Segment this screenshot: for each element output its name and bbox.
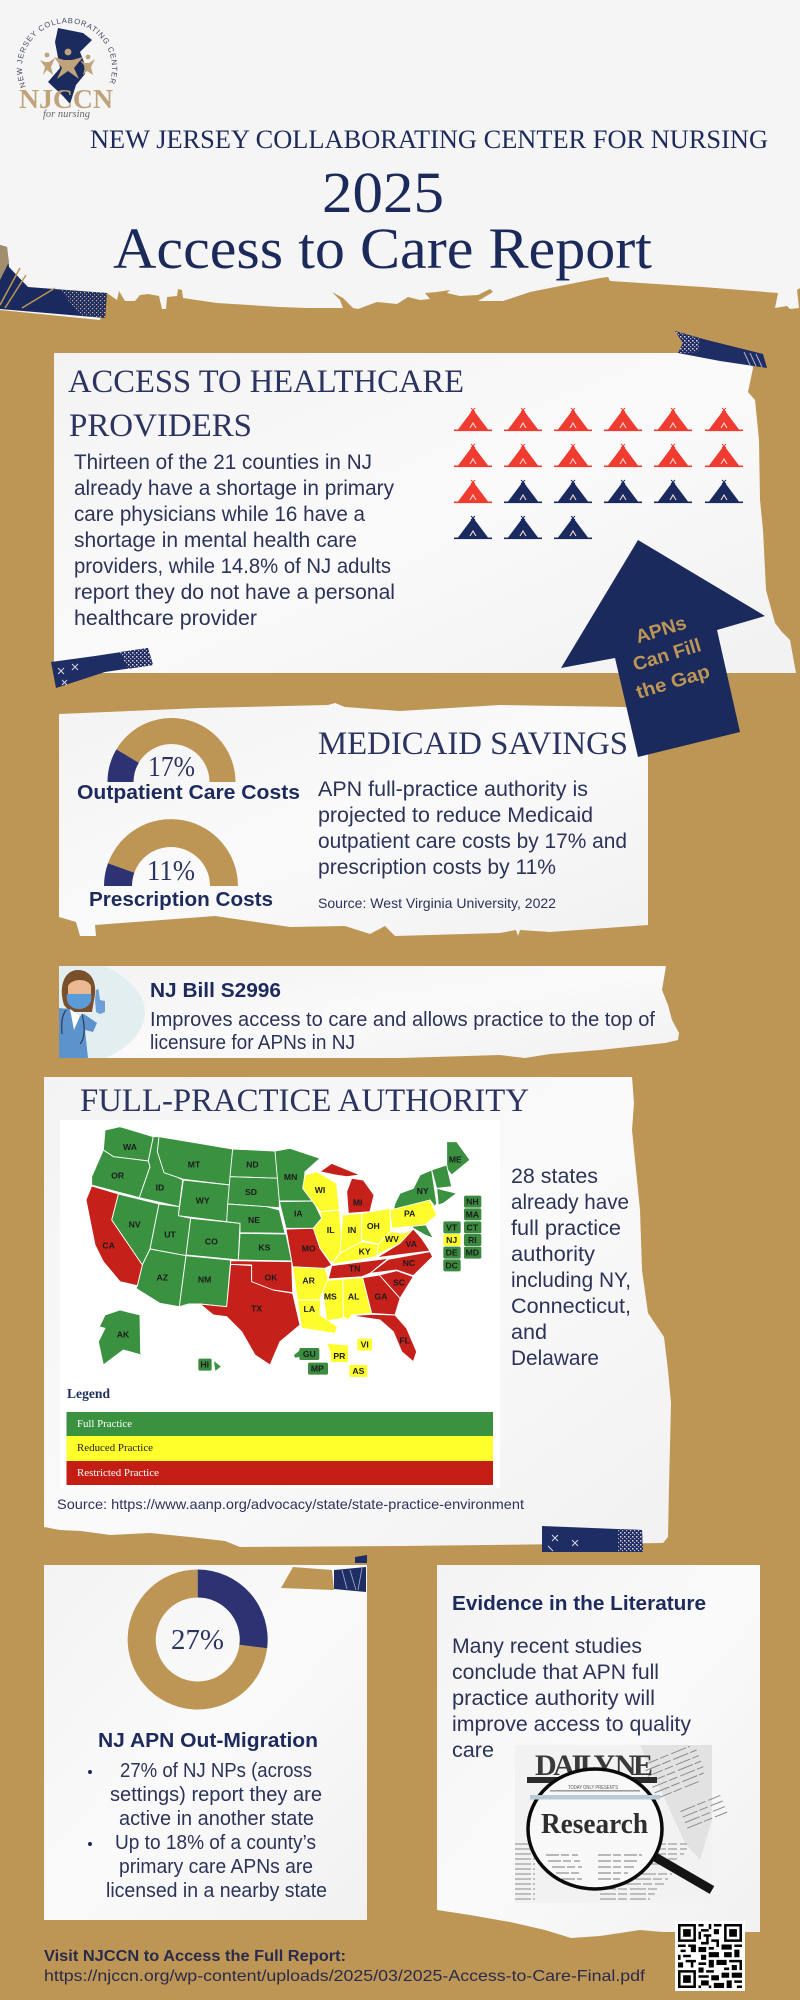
map background <box>60 1120 500 1488</box>
text: shortage body <box>74 451 395 630</box>
map: state labels: SC <box>393 1277 406 1287</box>
tape: full-practice panel <box>542 1526 643 1552</box>
tape: header <box>0 245 107 318</box>
arrow: APNs can fill the gap: the Gap <box>634 661 713 704</box>
chart: 27 percent donut: 27% <box>171 1624 224 1656</box>
list: out-migration bullets: 27% of NJ NPs (across <box>120 1760 312 1782</box>
map: state labels: OK <box>265 1273 278 1283</box>
map: state labels: PR <box>333 1351 346 1361</box>
chart: US map of practice authority <box>86 1127 481 1377</box>
logo: NEW JERSEY COLLABORATING CENTER <box>16 18 118 88</box>
header org name: NEW JERSEY COLLABORATING CENTER FOR NURSING <box>90 125 768 154</box>
heading: access to healthcare providers: PROVIDERS <box>69 408 252 444</box>
heading: full-practice authority: FULL-PRACTICE AUTHORITY <box>80 1083 529 1119</box>
map: state labels: WI <box>315 1185 325 1195</box>
text: evidence body: Many recent studies <box>452 1635 642 1658</box>
map: state labels: MA <box>466 1209 480 1219</box>
map: state labels: OR <box>111 1170 125 1180</box>
research word: Research <box>541 1808 648 1840</box>
map panel <box>60 1120 500 1488</box>
map: state labels: AK <box>117 1330 130 1340</box>
header panel <box>0 0 800 320</box>
tape: panel bottom left <box>51 648 153 688</box>
text: evidence body: improve access to quality <box>452 1713 691 1736</box>
map: state labels: IL <box>327 1225 335 1235</box>
list: out-migration bullets <box>88 1760 327 1902</box>
text: 28 states: Delaware <box>511 1347 599 1370</box>
newspaper base <box>515 1745 712 1903</box>
text: medicaid source: Source: West Virginia University, 2022 <box>318 895 556 911</box>
map: territory boxes <box>198 1196 481 1377</box>
newspaper column lines <box>515 1743 727 1899</box>
chart: outpatient gauge: 17% <box>148 751 195 783</box>
icon array: 21 counties, 13 with shortage <box>454 408 743 539</box>
chart: prescription gauge: 11% <box>147 855 195 887</box>
text: 28 states: Connecticut, <box>511 1295 631 1318</box>
text: evidence body <box>452 1635 691 1762</box>
map: state labels: ID <box>156 1183 164 1193</box>
map: state labels: VA <box>406 1239 418 1249</box>
map: state labels: OH <box>367 1221 380 1231</box>
map: state labels: MI <box>353 1198 362 1208</box>
panel: NJ bill <box>59 966 679 1058</box>
map: state labels: NC <box>403 1258 416 1268</box>
masthead: DAILY NE <box>535 1749 653 1782</box>
map: state labels: TN <box>349 1264 360 1274</box>
text: medicaid body: projected to reduce Medicaid <box>318 804 593 827</box>
arrow: APNs can fill the gap <box>561 540 765 757</box>
heading: evidence in the literature: Evidence in the Literature <box>452 1593 706 1615</box>
map: state labels: GU <box>303 1349 316 1359</box>
text: shortage body: report they do not have a personal <box>74 581 395 604</box>
heading: access to healthcare providers: ACCESS TO HEALTHCARE <box>68 364 464 400</box>
text: shortage body: care physicians while 16 have a <box>74 503 365 526</box>
map: state labels: DE <box>446 1248 458 1258</box>
chart: outpatient gauge <box>107 718 236 783</box>
image: research newspaper <box>515 1743 727 1903</box>
text: medicaid body: outpatient care costs by 17% and <box>318 830 627 853</box>
list: out-migration bullets: primary care APNs are <box>119 1856 313 1878</box>
panel: access to healthcare providers <box>54 353 796 673</box>
map: state labels: AL <box>348 1291 360 1301</box>
heading: medicaid savings: MEDICAID SAVINGS <box>318 726 628 762</box>
chart: prescription gauge <box>104 819 238 887</box>
map: state labels: MD <box>466 1248 479 1258</box>
text: 28 states: including NY, <box>511 1269 631 1292</box>
list: out-migration bullets: Up to 18% of a county’s <box>115 1832 316 1854</box>
text: map source: Source: https://www.aanp.org/advocacy/state/state-practice-environment <box>57 1496 524 1512</box>
map legend: Reduced Practice <box>77 1442 153 1454</box>
logo: NJCCN: NJCCN <box>19 84 114 114</box>
map: state labels: CT <box>467 1222 479 1232</box>
map legend: Restricted Practice <box>77 1467 159 1479</box>
map: state labels: AS <box>352 1366 365 1376</box>
label: outpatient care costs: Outpatient Care Costs <box>77 782 300 804</box>
map legend: Full Practice <box>77 1418 132 1430</box>
map: state labels: RI <box>468 1235 477 1245</box>
map: state labels: AZ <box>157 1273 169 1283</box>
text: call to action: https://njccn.org/wp-content/uploads/2025/03/2025-Access-to-Care-Final.pdf <box>44 1968 646 1985</box>
heading: access to healthcare providers <box>68 364 464 444</box>
arrow: APNs can fill the gap: APNs <box>633 613 689 648</box>
map: state labels: KY <box>359 1246 371 1256</box>
logo <box>16 18 118 120</box>
map: state labels: FL <box>399 1336 411 1346</box>
text: medicaid body: APN full-practice authority is <box>318 778 588 801</box>
panel: medicaid savings <box>59 703 648 936</box>
panel: evidence in the literature <box>437 1565 760 1938</box>
tape: out-migration panel <box>281 1555 367 1592</box>
heading: NJ APN out-migration: NJ APN Out-Migration <box>98 1730 318 1752</box>
map: state labels: NM <box>198 1274 211 1284</box>
logo: figures <box>40 49 95 79</box>
list: out-migration bullets: licensed in a nearby state <box>106 1880 327 1902</box>
list: out-migration bullets: settings) report they are <box>110 1784 322 1806</box>
map: state labels: CO <box>205 1236 218 1246</box>
panel: full-practice authority <box>44 1077 671 1547</box>
map legend <box>66 1387 493 1485</box>
logo: tagline: for nursing <box>43 109 90 120</box>
heading: NJ bill: NJ Bill S2996 <box>150 980 281 1002</box>
map: state labels: IA <box>294 1209 303 1219</box>
map: state labels: MO <box>302 1244 316 1254</box>
text: 28 states: already have <box>511 1191 629 1214</box>
text: NJ bill body: licensure for APNs in NJ <box>150 1032 355 1054</box>
text: NJ bill body <box>150 1009 655 1054</box>
map: state labels: SD <box>245 1187 257 1197</box>
map: state labels: AR <box>302 1275 316 1285</box>
map: state labels: MP <box>311 1364 324 1374</box>
map: state labels: WY <box>196 1195 210 1205</box>
text: 28 states: 28 states <box>511 1165 598 1188</box>
map: state labels: LA <box>304 1304 316 1314</box>
text: call to action: Visit NJCCN to Access the Full Report: <box>44 1948 346 1965</box>
map: state labels: VT <box>446 1222 458 1232</box>
magnifier lens <box>528 1769 662 1889</box>
map: state labels: IN <box>348 1225 356 1235</box>
map: state labels: WA <box>123 1142 138 1152</box>
map: state labels: NY <box>417 1186 429 1196</box>
map: state labels: CA <box>102 1240 116 1250</box>
text: shortage body: already have a shortage in primary <box>74 477 394 500</box>
map: state labels: HI <box>200 1360 209 1370</box>
text: medicaid body: prescription costs by 11% <box>318 856 556 879</box>
title: Access to Care Report <box>113 216 652 281</box>
text: NJ bill body: Improves access to care and allows practice to the top of <box>150 1009 655 1031</box>
map: state labels: PA <box>404 1209 416 1219</box>
text: shortage body: Thirteen of the 21 counties in NJ <box>74 451 372 474</box>
text: shortage body: healthcare provider <box>74 607 257 630</box>
map: state labels: TX <box>251 1304 262 1314</box>
text: shortage body: providers, while 14.8% of NJ adults <box>74 555 391 578</box>
text: 28 states: authority <box>511 1243 596 1266</box>
map: state labels: GA <box>375 1291 388 1301</box>
map: state labels: KS <box>258 1242 271 1252</box>
arrow: APNs can fill the gap: Can Fill <box>631 635 704 676</box>
map: state labels: MT <box>188 1159 201 1169</box>
label: prescription costs: Prescription Costs <box>89 889 273 911</box>
tape: panel top right <box>675 331 767 368</box>
map: state labels: VI <box>361 1340 369 1350</box>
text: shortage body: shortage in mental health care <box>74 529 357 552</box>
logo: ring text <box>22 23 112 87</box>
icon: nurse <box>59 966 145 1058</box>
map: state labels: DC <box>445 1260 459 1270</box>
map: state labels: NJ <box>446 1235 457 1245</box>
map: state labels: WV <box>385 1234 399 1244</box>
map: state labels: NE <box>248 1215 260 1225</box>
text: evidence body: conclude that APN full <box>452 1661 659 1684</box>
map legend: Legend <box>67 1387 110 1402</box>
map: state labels: MS <box>324 1291 337 1301</box>
image: research newspaper: TODAY ONLY PRESENTS <box>568 1785 619 1791</box>
text: evidence body: practice authority will <box>452 1687 655 1710</box>
map: state labels <box>102 1142 480 1376</box>
panel: out-migration <box>44 1565 367 1920</box>
map: state labels: MN <box>284 1172 297 1182</box>
map: state labels: ME <box>449 1155 462 1165</box>
text: 28 states <box>511 1165 631 1370</box>
list: out-migration bullets: active in another state <box>119 1808 314 1830</box>
text: call to action <box>44 1948 646 1985</box>
text: medicaid body <box>318 778 627 879</box>
text: evidence body: care <box>452 1739 494 1762</box>
map: state labels: UT <box>164 1230 176 1240</box>
logo: state silhouette <box>48 28 92 104</box>
map: state labels: NV <box>129 1219 141 1229</box>
map: state labels: NH <box>466 1197 479 1207</box>
text: 28 states: and <box>511 1321 547 1344</box>
title year: 2025 <box>322 160 444 225</box>
map: state labels: ND <box>246 1160 259 1170</box>
QR code <box>675 1921 745 1991</box>
chart: 27 percent donut <box>128 1570 268 1710</box>
text: 28 states: full practice <box>511 1217 621 1240</box>
magnifier handle <box>655 1857 712 1890</box>
